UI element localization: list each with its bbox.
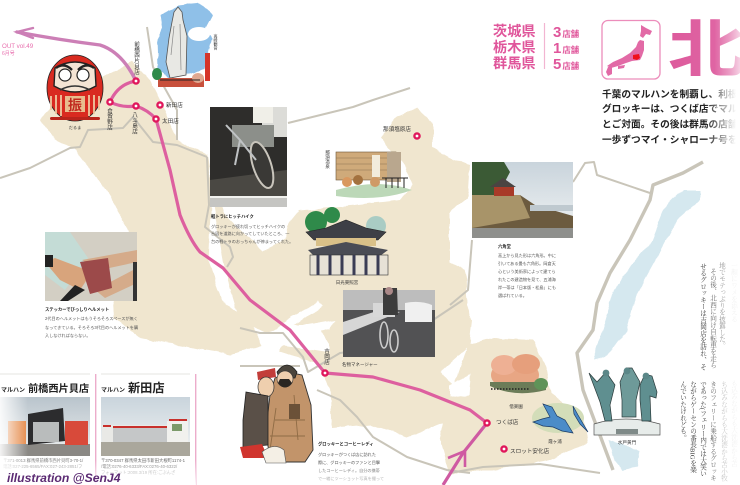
caption: bicycle hitchhike [211,213,293,244]
caption: Rokkakudo: れたこの建造物を見て、五浦海 [498,276,557,282]
label: previous issue [2,43,34,57]
caption: Glocky and coffee lady: 際に、グロッキーのファンと目撃 [318,459,380,465]
map land [40,62,587,477]
caption: helmet stickers: 2代目のヘルメットはもうそろそろスペースが無く [45,315,138,321]
vertical article text: きのフェリーに乗船するグロッキ [708,381,717,482]
caption: helmet stickers [45,306,138,338]
vertical article text: 地でモテっぷりを披露した。 [718,261,726,349]
caption: bicycle hitchhike: 台の軽トラのおっちゃんが停まってくれた。 [211,238,293,244]
label: Takasaki Kannon: 高崎観音 [214,33,218,51]
card title: 前橋西片貝店 [28,382,89,395]
vertical article text: ながらゲーセンの番長BIGを楽 [688,381,697,474]
card: Maebashi Nishikatakai store: 電話:027-225-6565/FAX:027-243-2851/フ [3,463,82,470]
photo: helmet stickers [45,232,137,301]
station labels: スロット安化店 [510,447,550,455]
card: Nitta store: /電話:0276-40-6333/FAX:0276-40-6322/ [101,463,178,470]
caption: helmet stickers: なってきている。そろそろ3代目のヘルメットを購 [45,324,138,330]
caption: Rokkakudo: 高上から見た形は六角形。中に [498,252,556,258]
station labels: 太田店 [162,117,179,125]
caption: bicycle hitchhike: 合図を道路に向かってしていたところ、一 [211,230,289,236]
card title: マルハン [101,387,125,394]
caption: Rokkakudo: 六角堂 [498,243,512,250]
vertical article text: であった(フェリー内では大笑い [698,381,707,477]
route line: previous issue to Maebashi [17,28,136,81]
label: famous manager: 名物マネージャー [342,361,378,368]
route line: arrow from the south [443,423,487,485]
vertical article text: んでいたけれども。 [678,381,687,441]
card title: マルハン [1,387,25,394]
station labels: 新田店 [166,101,183,109]
station labels: 倉賀野店 [106,108,113,132]
prefecture store counts: 群馬県 [493,55,536,72]
caption: Rokkakudo [498,243,557,298]
illustration: Nasu hot spring [336,152,412,198]
station labels: 八斗島店 [131,112,138,136]
illustration: Nikko Toshogu shrine [305,207,388,275]
caption: Glocky and coffee lady: グロッキーがつくば店に訪れた [318,451,376,457]
photo: bicycle on kei truck [210,107,287,207]
caption: Rokkakudo: 引いてある畳も六角形。岡倉天 [498,260,556,266]
illustration: Mito Komon statue [589,368,660,435]
card: Nitta store [101,374,196,485]
caption: Glocky and coffee lady [318,440,384,481]
vertical article text: 一顔にワメを添える [730,262,738,322]
card: Maebashi Nishikatakai store [0,374,96,485]
illustration: Glocky and coffee lady [240,365,313,463]
label: Nikko Toshogu: 日光東照宮 [336,279,359,286]
label: Mito Komon: 水戸黄門 [618,439,637,446]
illustration: Lake Kasumigaura [532,403,588,433]
lakes and coast water [593,190,700,470]
prefecture store counts: 3店舗 [553,24,580,41]
caption: bicycle hitchhike: グロッキーが疲れ切ってヒッチハイクの [211,223,285,229]
label: previous issue: 6月号 [2,51,15,57]
vertical article text [678,255,740,485]
caption: Glocky and coffee lady: で一緒にツーショット写真を撮って [318,475,384,481]
vertical article text: も込みながらも大洗港から苫 [730,380,738,468]
station labels: つくば店 [496,418,519,426]
label: Kasumigaura: 霞ヶ浦 [548,438,562,445]
card: Maebashi Nishikatakai store: 〒371-0013 群馬県前橋市西片貝町3-70-1/ [3,457,84,464]
vertical article text: その後、北西に向け自転車を走ら [708,268,717,370]
intro text: 一歩ずつマイ・シャローナ号を [602,133,738,146]
card: Nitta store: 〒370-0347 群馬県太田市新田大根町1174-1 [101,457,186,464]
icon: daruma: 振 [68,97,82,113]
vertical article text: せるグロッキーは吉岡店を訪れ、そ [698,263,707,370]
map stations [107,78,507,452]
label: daruma: だるま [69,125,81,131]
illustration: Takasaki Kannon statue [152,3,212,87]
photo: famous manager on bicycle [343,287,435,357]
station labels [106,40,550,455]
caption: Rokkakudo: 心という美術家によって建てら [498,268,556,274]
caption: Glocky and coffee lady: グロッキーとコーヒーレディ [318,440,374,448]
route line: main route [110,81,487,423]
prefecture store counts: 栃木県 [493,39,536,56]
icon: daruma [47,55,103,121]
label: Kairakuen: 偕楽園 [509,403,523,410]
caption: Rokkakudo: 岸一帯は「日本版・松島」にも [498,284,556,290]
caption: helmet stickers: 入しなければならない。 [45,332,91,338]
intro text [602,86,740,148]
caption: helmet stickers: ステッカーでびっしりヘルメット [45,306,109,313]
card: Nitta store: フォーマット:2008.3/19 所在:ごぶんざ [101,469,176,476]
label: previous issue: OUT vol.49 [2,43,34,50]
card title: 新田店 [128,380,165,395]
prefecture store counts: 5店舗 [553,56,580,73]
caption: Glocky and coffee lady: したコーヒーレディ。自分の携帯 [318,467,380,473]
prefecture store counts: 1店舗 [553,40,580,57]
illustration: Kairakuen cherry blossoms [490,354,548,393]
caption: Rokkakudo: 選ばれている。 [498,292,527,298]
prefecture store counts: 茨城県 [493,23,536,40]
station labels: 那須塩原店 [383,125,411,133]
caption: bicycle hitchhike: 軽トラにヒッチハイク [211,213,254,220]
station labels: 前橋西片貝店 [133,40,140,76]
white gaps in land [270,300,470,398]
credit: illustration: illustration @SenJ4 [7,471,121,485]
intro text: とご対面。その後は群馬の店舗 [602,118,738,130]
label: Nasu hot spring: 那須温泉 [325,149,330,169]
photo: Rokkakudo on the rocks [472,162,573,238]
icon: Japan map [602,20,660,79]
prefecture store counts [493,23,580,73]
station labels: 吉岡店 [323,348,330,366]
vertical article text: ち込みながらも大洗港から苫小牧 [720,381,728,483]
